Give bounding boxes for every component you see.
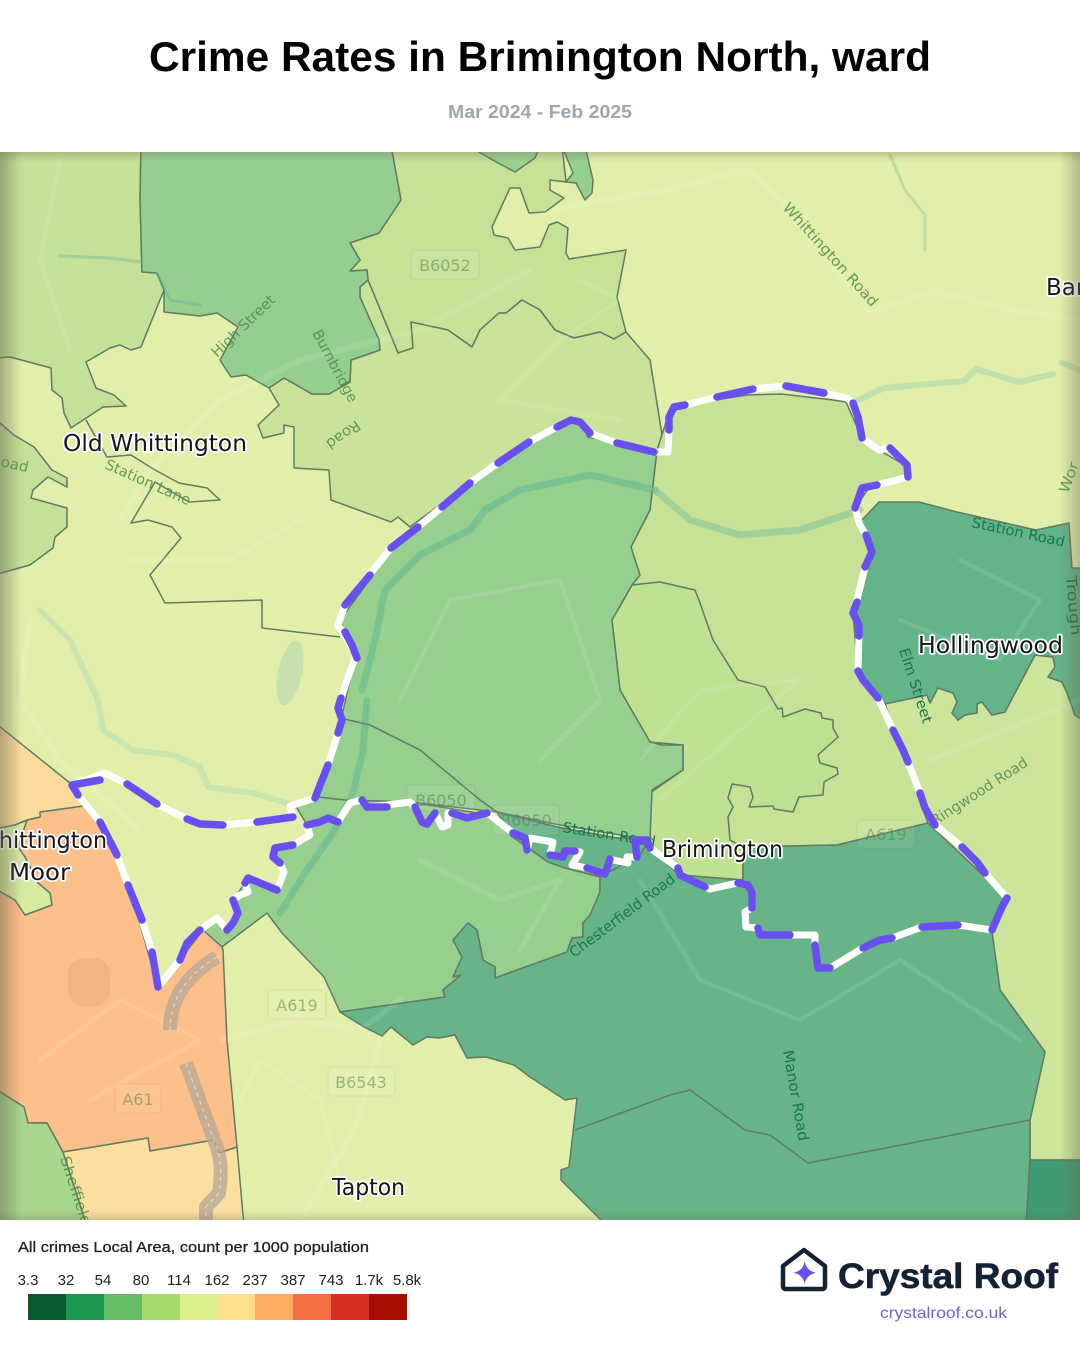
road number shields: A619 xyxy=(865,825,907,844)
legend tick labels: 387 xyxy=(280,1272,306,1289)
road number shields: B6050 xyxy=(415,791,467,810)
place names: Moor xyxy=(9,860,71,886)
road labels: Station Road xyxy=(561,820,657,851)
road labels: Station Road xyxy=(970,515,1066,551)
road number shields: B6052 xyxy=(419,256,471,275)
legend tick labels: 1.7k xyxy=(355,1272,384,1289)
road labels: Ringwood Road xyxy=(928,755,1031,829)
legend tick labels: 32 xyxy=(58,1272,74,1289)
legend title: All crimes Local Area, count per 1000 population xyxy=(18,1239,369,1256)
title: Crime Rates in Brimington North, ward xyxy=(149,33,931,80)
map edge fade xyxy=(0,152,1080,1220)
legend tick labels: 3.3 xyxy=(18,1272,38,1289)
road labels: Road xyxy=(323,417,363,452)
road labels: Chesterfield Road xyxy=(567,871,679,961)
icon: house with star xyxy=(783,1250,825,1289)
subtitle: date range: Mar 2024 - Feb 2025 xyxy=(448,102,632,122)
road number shields: B6050 xyxy=(500,811,552,830)
legend tick labels xyxy=(18,1272,422,1289)
road number shields: A619 xyxy=(276,996,318,1015)
rivers and canal xyxy=(40,155,1080,913)
legend xyxy=(18,1239,422,1320)
stadium footprint xyxy=(68,958,110,1006)
road labels: Whittington Road xyxy=(779,200,881,310)
legend tick labels: 54 xyxy=(95,1272,111,1289)
wordmark: Crystal Roof xyxy=(838,1257,1058,1296)
road labels: Station Lane xyxy=(102,457,193,509)
water: small lake xyxy=(276,640,304,706)
map areas: crime rate choropleth xyxy=(0,146,1080,1226)
road labels: Manor Road xyxy=(779,1049,811,1142)
motorway xyxy=(170,957,221,1226)
road labels: High Street xyxy=(209,292,279,361)
legend tick labels: 80 xyxy=(133,1272,149,1289)
road labels: Burnbridge xyxy=(308,327,360,406)
legend tick labels: 237 xyxy=(242,1272,268,1289)
place names: Brimington xyxy=(662,837,783,863)
legend tick labels: 743 xyxy=(318,1272,344,1289)
internal area boundaries xyxy=(86,420,1030,1163)
legend colour scale xyxy=(28,1294,407,1320)
legend tick labels: 162 xyxy=(204,1272,230,1289)
legend tick labels: 114 xyxy=(167,1272,191,1289)
ward boundary: Brimington North xyxy=(72,386,1007,987)
road labels xyxy=(0,200,1080,1228)
logo: Crystal Roof xyxy=(783,1250,1058,1322)
road number shields xyxy=(115,250,915,1113)
place names: Hollingwood xyxy=(918,633,1063,659)
road labels: Elm Street xyxy=(895,646,935,726)
place names: Tapton xyxy=(331,1175,405,1201)
legend tick labels: 5.8k xyxy=(393,1272,422,1289)
place names xyxy=(0,275,1080,1201)
main roads xyxy=(20,160,1080,1220)
place names: Old Whittington xyxy=(63,431,247,457)
road number shields: B6543 xyxy=(335,1073,387,1092)
road labels: Sheffield xyxy=(56,1154,94,1228)
website: crystalroof.co.uk xyxy=(880,1305,1008,1322)
road number shields: A61 xyxy=(122,1090,154,1109)
